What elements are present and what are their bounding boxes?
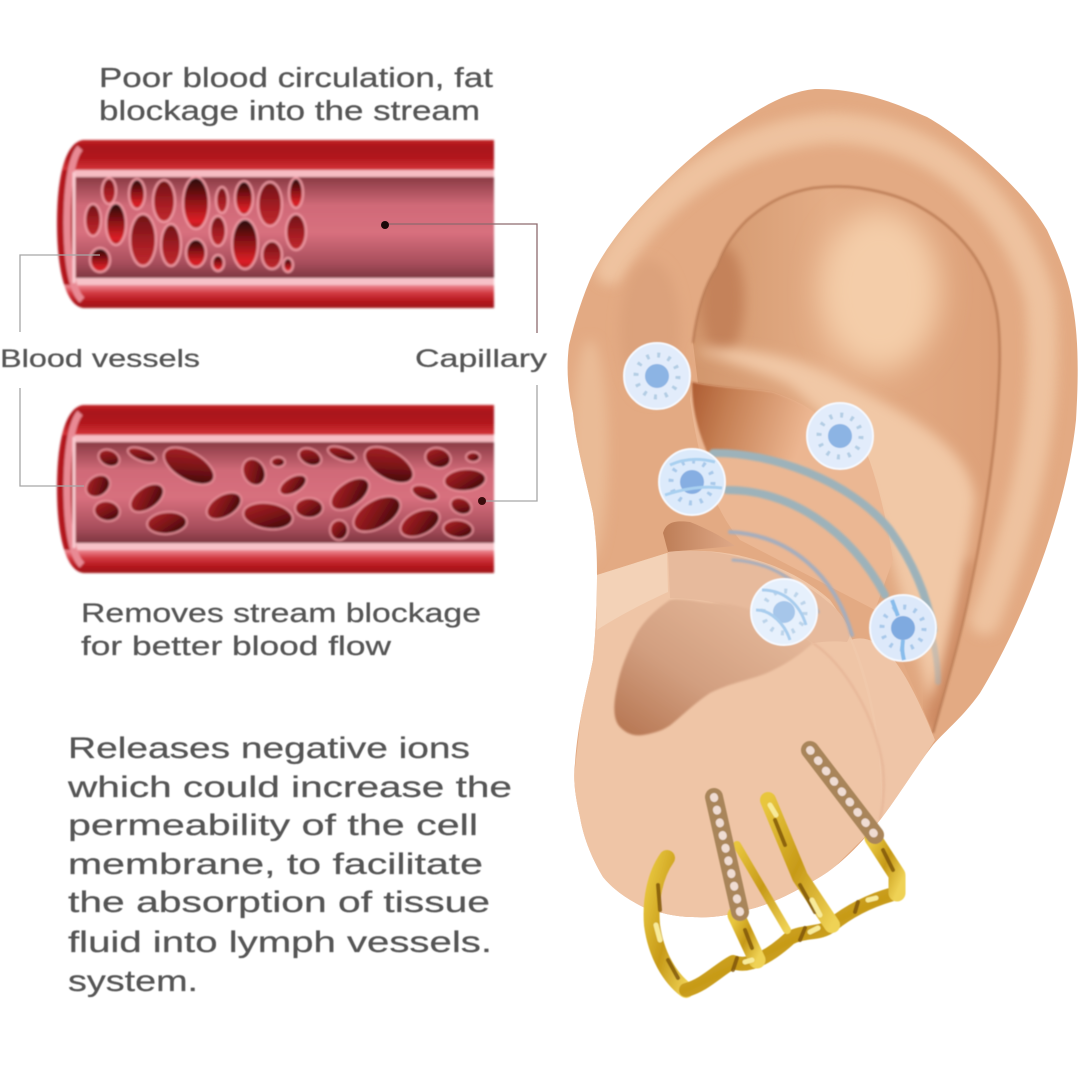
flowing red cells: [82, 439, 487, 543]
paragraph: negative ions: fluid into lymph vessels.: [68, 926, 492, 959]
ion disc 2: [807, 403, 873, 469]
ion disc 3: [659, 449, 725, 515]
vessel wall: [50, 140, 494, 308]
paragraph: negative ions: which could increase the: [67, 771, 512, 804]
ear illustration: [568, 89, 1078, 918]
earring dark streaks: [658, 820, 893, 978]
paragraph: negative ions: [67, 732, 512, 998]
callout lines: capillary: [381, 221, 537, 505]
heading: poor circulation: Poor blood circulation, fat: [99, 62, 493, 93]
earring highlights: [656, 805, 876, 962]
heading: poor circulation: [99, 62, 493, 126]
ion disc 5: [870, 595, 936, 661]
blood vessel: cleared: [50, 405, 494, 573]
helix bowl: [693, 202, 998, 731]
caption: removes blockage: for better blood flow: [81, 631, 392, 661]
paragraph: negative ions: the absorption of tissue: [68, 886, 490, 919]
vessel wall: [50, 405, 494, 573]
earring bar with stones 2: [810, 750, 875, 835]
antihelix light band: [695, 349, 975, 700]
gold earring: [652, 750, 897, 990]
ion wave arcs: [713, 453, 938, 682]
antitragus notch: [663, 521, 726, 552]
paragraph: negative ions: system.: [68, 965, 198, 998]
label: blood vessels: Blood vessels: [0, 345, 200, 373]
caption: removes blockage: Removes stream blockage: [81, 598, 481, 628]
concha base: [690, 382, 893, 610]
caption: removes blockage: [81, 598, 481, 661]
concha shadow: [692, 382, 815, 460]
paragraph: negative ions: permeability of the cell: [68, 809, 478, 842]
blood vessel: blocked: [50, 140, 494, 308]
ion disc 1: [624, 343, 690, 409]
callout lines: blood vessels: [20, 255, 100, 486]
ion disc 4: [751, 579, 817, 645]
lobe circle edge: [813, 643, 884, 820]
heading: poor circulation: blockage into the stream: [99, 95, 480, 126]
paragraph: negative ions: membrane, to facilitate: [68, 848, 483, 881]
blocked red cells: [85, 177, 306, 272]
lobe inner panel: [668, 551, 850, 643]
label: capillary: Capillary: [415, 345, 548, 373]
lobe wash: [574, 551, 881, 918]
bowl rim line: [693, 186, 1000, 733]
right lobe band: [850, 638, 935, 825]
ion discs: [624, 343, 936, 661]
ear flesh: [568, 89, 1078, 918]
earring frame: [652, 800, 897, 990]
paragraph: negative ions: Releases negative ions: [68, 732, 470, 765]
lobe hollow: [614, 599, 813, 735]
earring bar with stones 1: [714, 797, 740, 912]
lobe upper-left band: [597, 553, 668, 630]
